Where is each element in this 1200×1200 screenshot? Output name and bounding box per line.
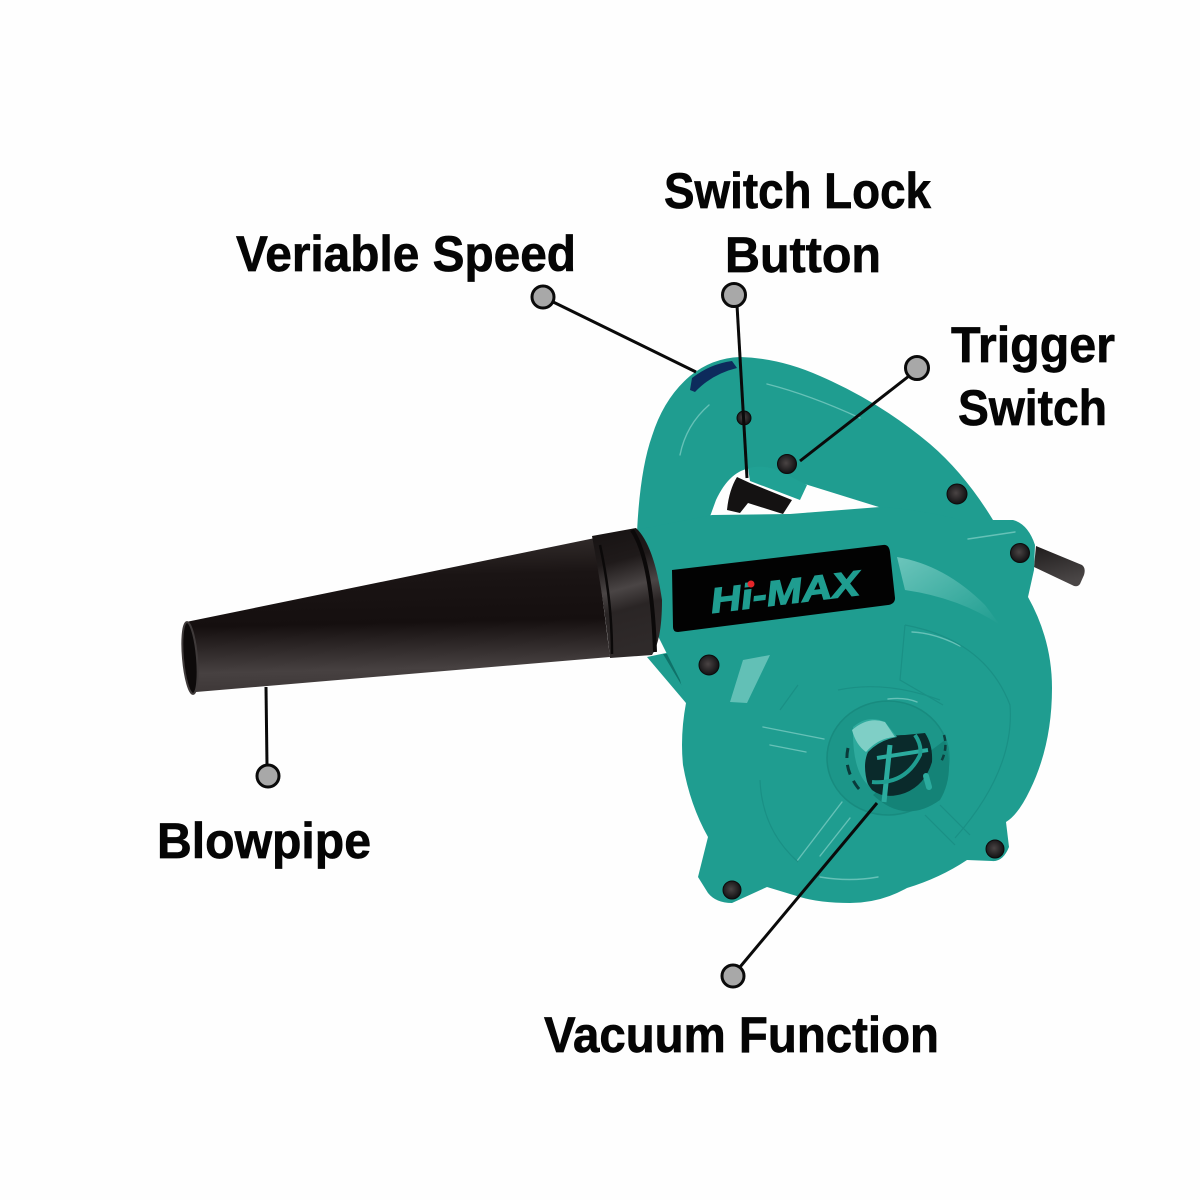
- logo text: Hi-MAX: [708, 564, 865, 621]
- callout: Trigger Switch: [800, 317, 1115, 461]
- handle opening: [711, 468, 882, 516]
- logo red dot: [748, 580, 754, 588]
- pipe collar: [592, 528, 662, 658]
- fan cover panel lines: [760, 625, 1010, 862]
- pipe taper: [186, 538, 610, 692]
- Hi-MAX logo plate: [672, 545, 895, 632]
- callout: Blowpipe: Blowpipe: [157, 813, 371, 869]
- callout: Switch Lock Button: [664, 163, 931, 478]
- callout: Switch Lock Button: Switch Lock: [664, 163, 931, 219]
- blowpipe: [180, 528, 662, 694]
- callout: Vacuum Function: Vacuum Function: [544, 1007, 939, 1063]
- callout: Vacuum Function: [544, 803, 939, 1063]
- trigger housing: [748, 467, 807, 500]
- pipe mouth: [180, 622, 200, 694]
- main blower housing: [636, 507, 1052, 903]
- vacuum inlet grille: [847, 719, 945, 802]
- callout: Veriable Speed: [236, 226, 696, 372]
- blower housing lower lug under pipe: [647, 648, 720, 703]
- vacuum inlet ring: [827, 701, 949, 815]
- power cord stub: [1034, 546, 1085, 586]
- highlights on housing: [680, 384, 1015, 880]
- variable speed dial: [690, 361, 737, 392]
- callout: Veriable Speed: Veriable Speed: [236, 226, 576, 282]
- vacuum inlet tube shadow: [873, 740, 949, 811]
- glossy patches: [897, 557, 1000, 625]
- product: Hi-MAX electric blower: [180, 357, 1085, 903]
- handle: [637, 357, 1000, 560]
- callout: Trigger Switch: Trigger: [951, 317, 1115, 373]
- callout: Blowpipe: [157, 687, 371, 869]
- callout: Trigger Switch: Switch: [958, 380, 1107, 436]
- callout: Switch Lock Button: Button: [725, 227, 881, 283]
- switch lock button: [727, 477, 792, 514]
- screws: [699, 411, 1030, 899]
